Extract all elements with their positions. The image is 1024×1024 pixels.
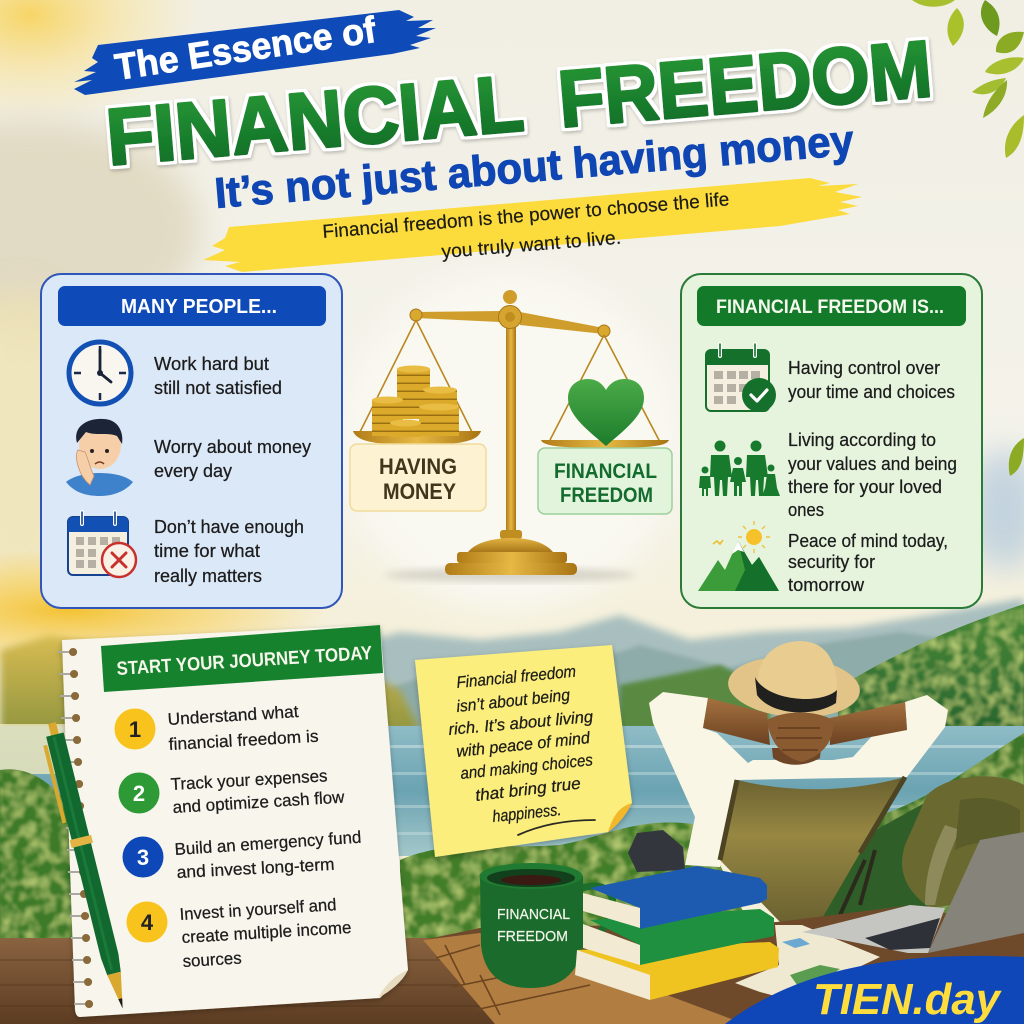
handwritten note: happiness. bbox=[492, 801, 562, 826]
mug handle bbox=[582, 886, 613, 945]
laptop bbox=[802, 832, 1024, 953]
icon: calendar with cross bbox=[68, 512, 136, 577]
icon: calendar with check bbox=[706, 344, 776, 412]
step 2: 2 bbox=[133, 781, 145, 806]
step 4: create multiple income bbox=[181, 918, 352, 947]
notebook bbox=[58, 625, 408, 1017]
icon: family bbox=[699, 440, 780, 496]
panel header bbox=[697, 286, 966, 326]
green book bbox=[590, 909, 774, 965]
text: peace of mind: tomorrow bbox=[788, 575, 865, 595]
text: control bbox=[788, 358, 955, 402]
scale stand bbox=[445, 326, 577, 575]
text: worry: Worry about money bbox=[154, 437, 311, 457]
step 3: Build an emergency fund bbox=[174, 828, 362, 859]
text: peace of mind bbox=[788, 531, 948, 595]
scale beam bbox=[410, 290, 610, 337]
label: financial freedom: FINANCIAL bbox=[554, 460, 657, 483]
notebook header: START YOUR JOURNEY TODAY bbox=[116, 643, 373, 680]
title block bbox=[74, 9, 935, 272]
heading: FINANCIAL FREEDOM bbox=[103, 24, 935, 182]
panel header bbox=[58, 286, 326, 326]
notebook header bbox=[101, 625, 383, 692]
text: worry bbox=[154, 437, 311, 481]
yellow book bbox=[577, 942, 779, 1000]
notebook rings bbox=[58, 652, 89, 1004]
sticky note bbox=[415, 645, 632, 857]
text: not enough time: Don’t have enough bbox=[154, 517, 304, 537]
text: values: there for your loved bbox=[788, 477, 942, 497]
label: having money: HAVING bbox=[379, 454, 457, 479]
chair bbox=[720, 777, 905, 922]
handwritten note: that bring true bbox=[474, 775, 582, 805]
panel header: MANY PEOPLE... bbox=[121, 296, 277, 318]
legs bbox=[628, 830, 685, 872]
gold coins bbox=[372, 366, 459, 437]
tagline: you truly want to live. bbox=[441, 228, 622, 263]
heading: FINANCIAL FREEDOM: FREEDOM bbox=[555, 24, 935, 144]
icon: mountain and sun bbox=[698, 521, 779, 591]
brand corner bbox=[725, 956, 1024, 1024]
balance scale bbox=[350, 290, 672, 582]
icon: pen bbox=[38, 720, 133, 1012]
sticky curl bbox=[608, 803, 632, 832]
hat bbox=[726, 641, 862, 722]
blue book bbox=[590, 866, 767, 929]
tagline: Financial freedom is the power to choose the life bbox=[322, 189, 730, 243]
text: not enough time: really matters bbox=[154, 566, 262, 586]
panel header: FINANCIAL FREEDOM IS... bbox=[716, 297, 944, 318]
step 4: sources bbox=[182, 949, 242, 971]
step 1: Understand what bbox=[167, 702, 299, 729]
handwritten note: Financial freedom bbox=[456, 663, 577, 692]
icon: clock bbox=[69, 342, 131, 404]
handwritten note: with peace of mind bbox=[456, 729, 591, 761]
mug label bbox=[497, 906, 570, 945]
step 2: and optimize cash flow bbox=[172, 787, 346, 817]
text: work hard bbox=[154, 354, 282, 398]
label: financial freedom bbox=[538, 448, 672, 514]
brush: blue bbox=[74, 10, 436, 95]
handwritten note bbox=[448, 663, 595, 826]
right pan bbox=[541, 440, 669, 448]
text: not enough time: time for what bbox=[154, 541, 260, 561]
brand corner: TIEN.day bbox=[813, 975, 1002, 1024]
left pan bbox=[353, 431, 481, 445]
text: values: ones bbox=[788, 500, 824, 520]
text: not enough time bbox=[154, 517, 304, 586]
mug label: FREEDOM bbox=[497, 928, 568, 945]
step 1: 1 bbox=[129, 717, 141, 742]
coffee mug bbox=[480, 863, 613, 988]
icon: worried person bbox=[66, 419, 133, 496]
text: control: your time and choices bbox=[788, 382, 955, 402]
text: work hard: Work hard but bbox=[154, 354, 269, 374]
step 4 bbox=[126, 895, 352, 971]
subheading: It’s not just about having money bbox=[213, 116, 856, 218]
step 3: 3 bbox=[137, 845, 149, 870]
text: values bbox=[788, 430, 957, 520]
stack of books bbox=[575, 866, 779, 1000]
text: values: Living according to bbox=[788, 430, 936, 450]
mug label: FINANCIAL bbox=[497, 906, 570, 923]
backpack bbox=[902, 776, 1024, 908]
label: having money bbox=[350, 444, 486, 511]
map bbox=[735, 925, 880, 1000]
heading: The Essence of: The Essence of bbox=[112, 9, 379, 88]
text: peace of mind: Peace of mind today, bbox=[788, 531, 948, 551]
label: having money: MONEY bbox=[383, 479, 456, 504]
neck bbox=[772, 748, 821, 765]
chair legs bbox=[840, 850, 875, 915]
step 3 bbox=[122, 828, 362, 882]
label: financial freedom: FREEDOM bbox=[560, 484, 653, 507]
handwritten note: rich. It’s about living bbox=[448, 708, 595, 739]
white shirt bbox=[649, 692, 948, 867]
left strings bbox=[360, 320, 472, 432]
text: control: Having control over bbox=[788, 358, 940, 378]
panel: financial freedom is bbox=[681, 274, 982, 608]
step 4: Invest in yourself and bbox=[179, 895, 337, 924]
panel: many people bbox=[41, 274, 342, 608]
table bbox=[0, 905, 1024, 1024]
step 3: and invest long-term bbox=[176, 855, 335, 882]
step 1: financial freedom is bbox=[168, 727, 319, 754]
text: worry: every day bbox=[154, 461, 232, 481]
leaves: top-right branch bbox=[912, 0, 1024, 476]
man relaxing in a chair bbox=[628, 641, 948, 922]
handwritten note: and making choices bbox=[460, 751, 594, 783]
step 2: Track your expenses bbox=[170, 766, 328, 794]
text: peace of mind: security for bbox=[788, 552, 875, 572]
step 4: 4 bbox=[141, 910, 154, 935]
page curl bbox=[378, 970, 408, 998]
hands bbox=[767, 712, 833, 762]
text: work hard: still not satisfied bbox=[154, 378, 282, 398]
right strings bbox=[550, 335, 660, 442]
arms bbox=[703, 698, 770, 745]
heading: FINANCIAL FREEDOM: FINANCIAL bbox=[103, 58, 527, 182]
handwritten note: isn’t about being bbox=[456, 686, 572, 716]
step 1 bbox=[114, 702, 319, 754]
brush: yellow bbox=[203, 178, 862, 272]
step 2 bbox=[118, 766, 346, 817]
text: values: your values and being bbox=[788, 454, 957, 474]
heart bbox=[568, 379, 644, 446]
